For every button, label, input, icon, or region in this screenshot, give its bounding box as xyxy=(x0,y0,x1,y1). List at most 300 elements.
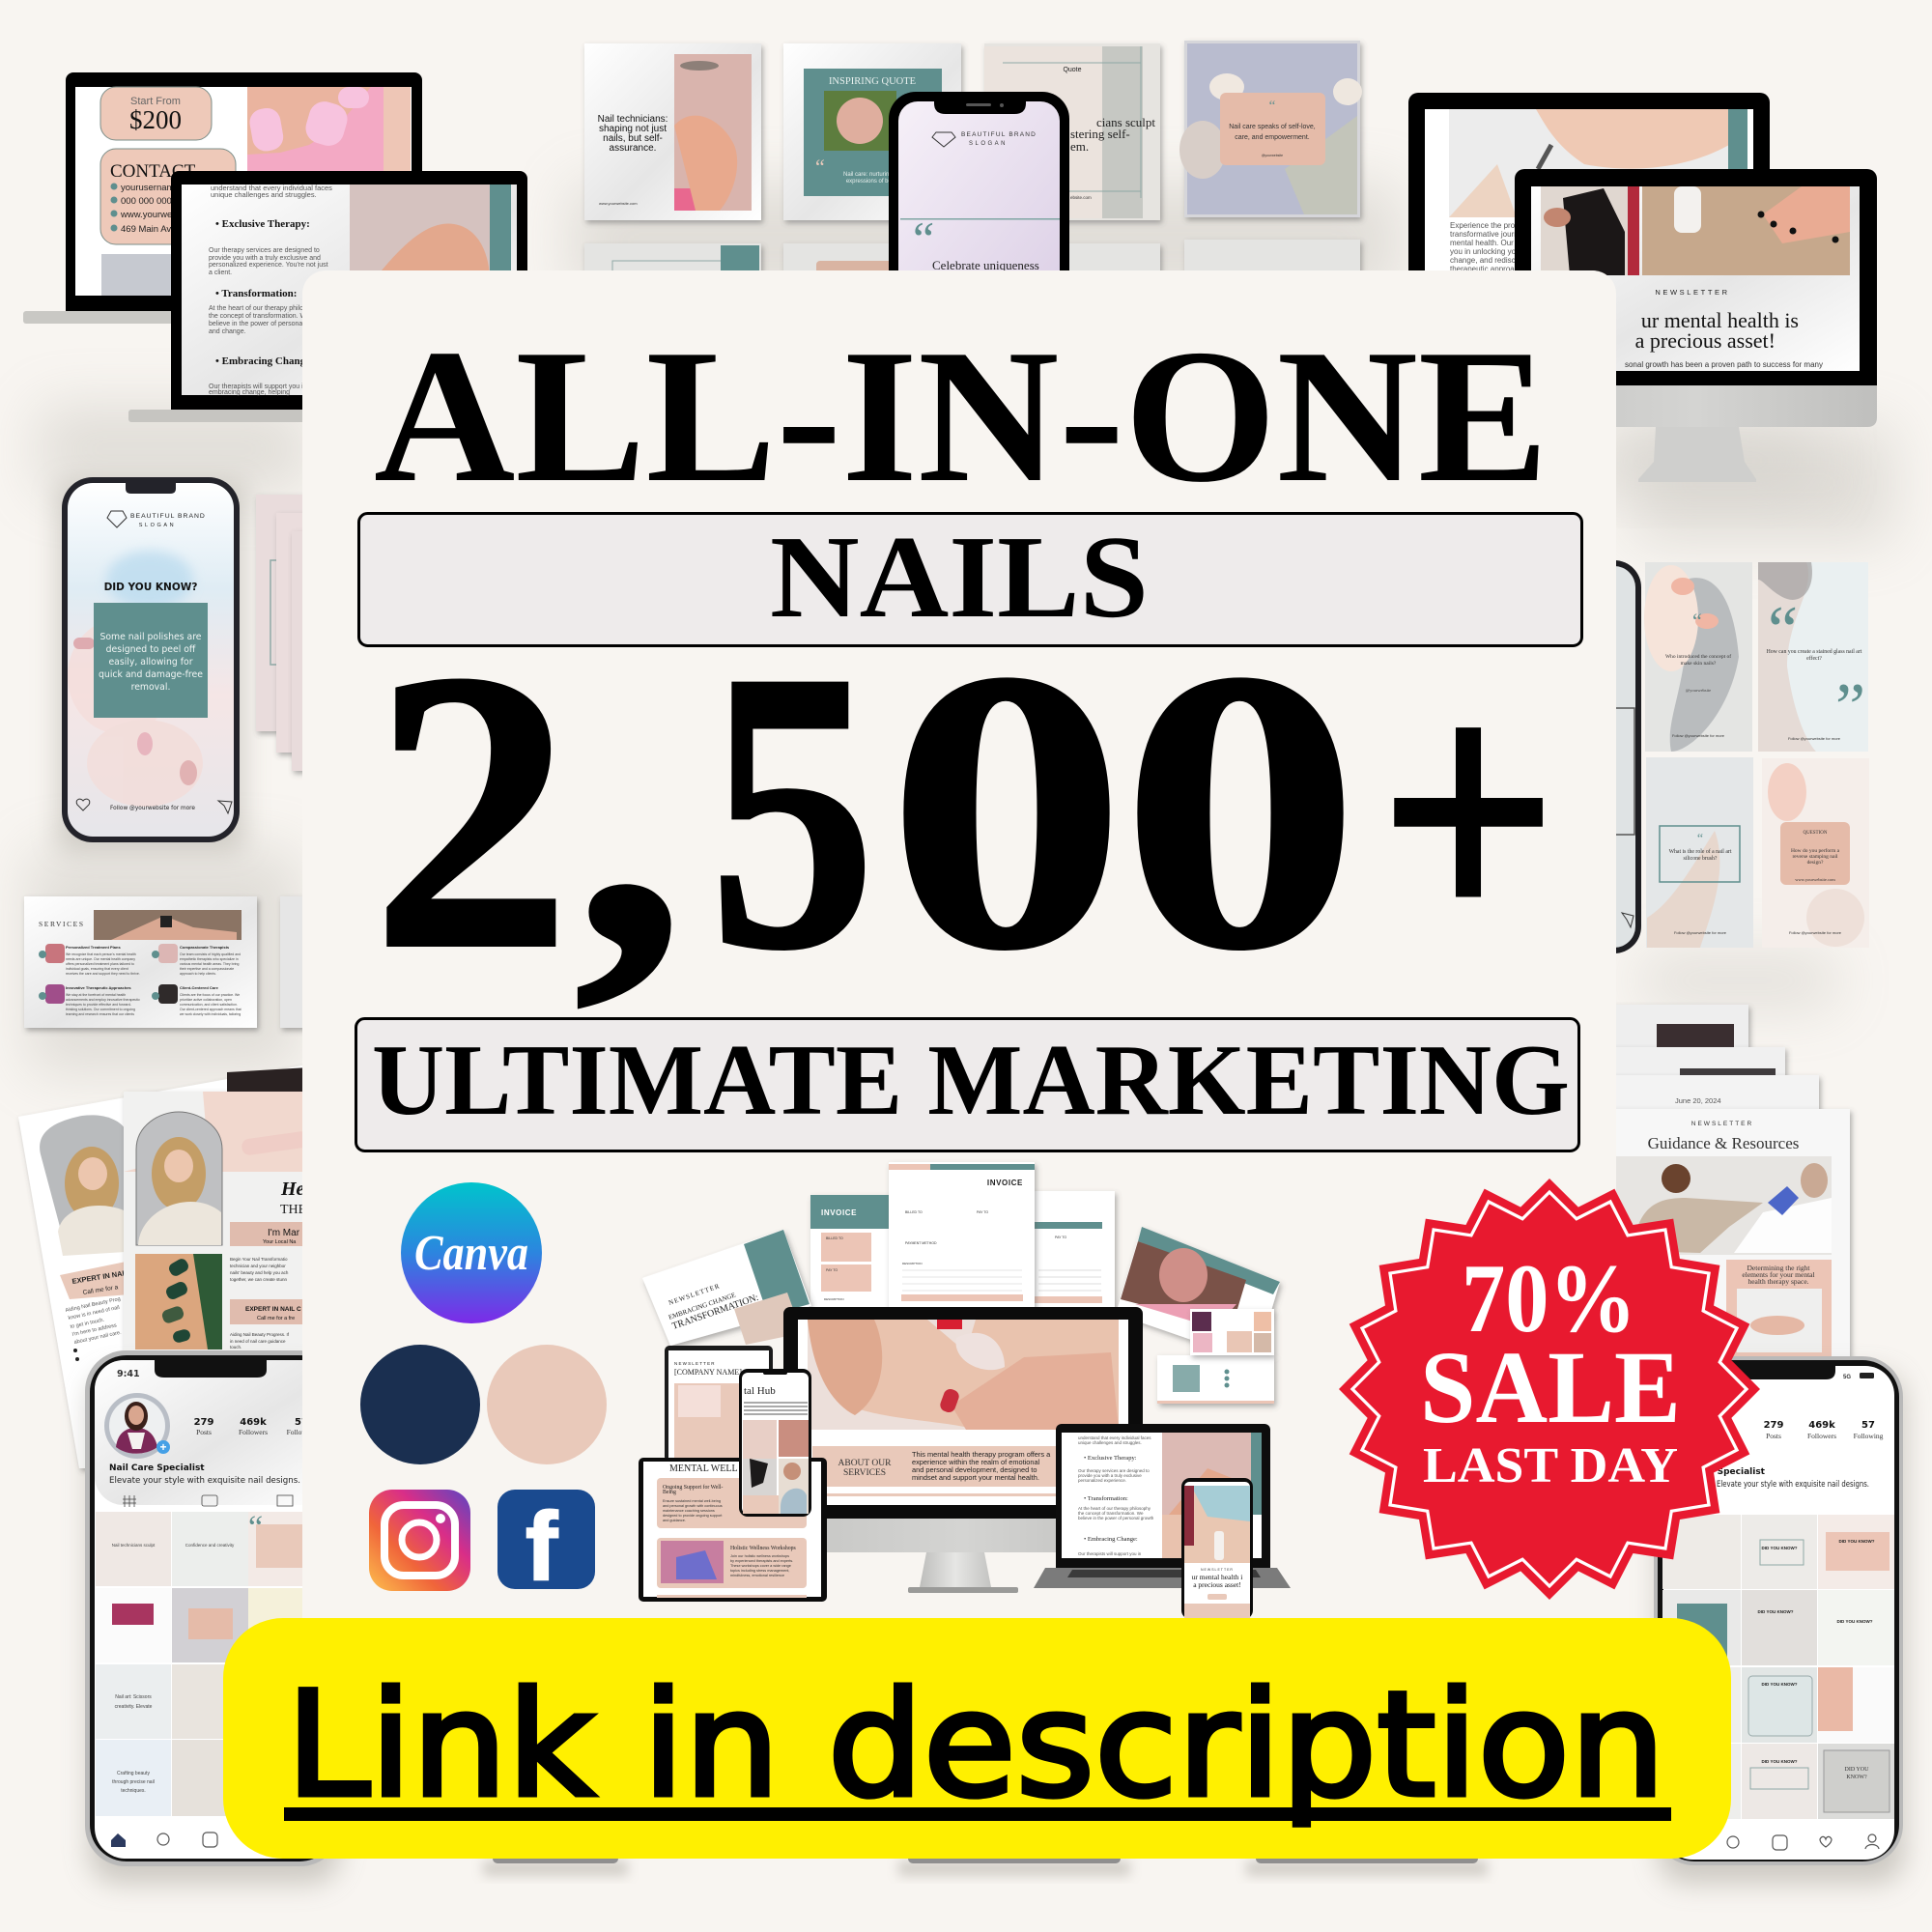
tablet front: Ensure sustained mental well-being xyxy=(663,1499,721,1503)
post grid: techniques. xyxy=(121,1788,146,1794)
phone: top center: BEAUTIFUL BRAND xyxy=(961,131,1037,138)
phone mini left: tal Hub xyxy=(744,1385,776,1397)
invoice right: PAY TO xyxy=(1055,1236,1066,1239)
monitor front: newsletter: sonal growth has been a proven path to success for many xyxy=(1625,360,1823,369)
service items: We recognize that each person's mental health xyxy=(66,952,136,956)
soft mockup shadows xyxy=(29,184,1893,1072)
big number: 2,500+: , xyxy=(574,590,686,1032)
service items: Our client-centered approach means that xyxy=(180,1008,242,1011)
phone: instagram profile right: Elevate your style with exquisite nail designs. xyxy=(1717,1480,1869,1490)
laptop: • Exclusive Therapy: xyxy=(1084,1455,1137,1462)
laptop: provide you with a truly exclusive xyxy=(1078,1473,1142,1478)
therapy text: provide you with a truly exclusive and xyxy=(209,255,321,262)
laptop: unique challenges and struggles. xyxy=(1078,1440,1142,1445)
therapy text: understand that every individual faces xyxy=(211,184,332,192)
contact card xyxy=(100,149,236,244)
title: ALL-IN-ONE: ALL-IN-ONE xyxy=(374,310,1548,522)
post grid: DID YOU KNOW? xyxy=(1839,1539,1875,1544)
invoice center: BILLED TO xyxy=(905,1210,923,1214)
big number: 2,500+: 5 xyxy=(709,590,875,1032)
rotated newsletter left: NEWSLETTER xyxy=(668,1282,721,1307)
heading box: NAILS xyxy=(359,512,1582,645)
rotated newsletter left: EMBRACING CHANGE xyxy=(668,1292,737,1321)
flyer: front: technician and your neighbor xyxy=(230,1264,286,1268)
phone: instagram profile right: 5G xyxy=(1843,1375,1851,1380)
nail salon photo xyxy=(1616,1156,1832,1255)
newsletter stack: NEWSLETTER xyxy=(1691,1121,1753,1127)
collage card xyxy=(1157,1309,1274,1404)
laptop: personalized experience. xyxy=(1078,1478,1126,1483)
tablet back: [COMPANY NAME] xyxy=(674,1368,742,1377)
post grid card: peach question: reverse stamping nail xyxy=(1792,854,1838,860)
services card xyxy=(24,896,319,1028)
tablet front: Being xyxy=(663,1490,676,1495)
sale badge xyxy=(1339,1179,1760,1600)
profile stats: Following xyxy=(1854,1432,1884,1440)
phone: top center: Celebrate uniqueness xyxy=(932,258,1039,272)
social post: nail technicians: assurance. xyxy=(610,143,656,154)
newsletter stack: Guidance & Resources xyxy=(1648,1134,1799,1152)
big number: 2,500+: 0 xyxy=(888,590,1125,1032)
therapy text: At the heart of our therapy philosophy xyxy=(209,305,322,312)
big number: 2,500+: + xyxy=(1379,613,1557,1008)
icon: Instagram xyxy=(369,1490,470,1591)
flyer: front: THE xyxy=(280,1203,306,1217)
social post: quote face: Quote xyxy=(1063,67,1082,73)
post grid: DID YOU KNOW? xyxy=(1758,1609,1794,1614)
profile stats: 57 xyxy=(1861,1420,1875,1431)
tablet front: maintenance coaching sessions xyxy=(663,1509,715,1513)
about our services band: mindset and support your mental health. xyxy=(912,1473,1039,1482)
green nails photo xyxy=(135,1254,222,1350)
laptop: Our therapy services are designed to xyxy=(1078,1468,1150,1473)
tablet front: Holistic Wellness Workshops xyxy=(730,1546,797,1551)
service items: we work closely with individuals, tailoring xyxy=(180,1012,241,1016)
brand logo xyxy=(107,511,206,528)
monitor front: newsletter: ur mental health is xyxy=(1641,308,1799,332)
icon: Facebook xyxy=(497,1490,595,1601)
social post: self-love: @yourwebsite xyxy=(1262,154,1283,157)
tablet front: designed to provide ongoing support xyxy=(663,1514,723,1518)
stacked pink post cards xyxy=(256,495,315,771)
therapy text: • Embracing Change: xyxy=(215,355,314,367)
post grid card: quote face: effect? xyxy=(1806,655,1822,662)
tablet front xyxy=(639,1458,827,1602)
service items: Personalized Treatment Plans xyxy=(66,945,121,950)
avatar xyxy=(104,1393,170,1459)
invoice left xyxy=(810,1195,897,1321)
contact card: 469 Main Ave xyxy=(121,224,176,235)
flyer: rotated back: about your nail care. xyxy=(73,1330,123,1346)
phone: did you know xyxy=(58,477,243,850)
portrait arch xyxy=(136,1112,222,1245)
hand photo xyxy=(124,1092,309,1172)
flyer: front: He xyxy=(280,1179,305,1200)
phone: did you know: Follow @yourwebsite for more xyxy=(110,806,195,811)
invoice center: PAYMENT METHOD xyxy=(905,1241,937,1245)
colour swatch: peach xyxy=(487,1345,607,1464)
nav bar icons xyxy=(111,1833,217,1847)
post grid xyxy=(1662,1515,1894,1819)
post grid card: framed question: “ xyxy=(1697,832,1703,846)
profile stats: Following xyxy=(287,1428,317,1436)
post grid card: quote face: Follow @yourwebsite for more xyxy=(1788,736,1841,741)
social post: inspiring quote: INSPIRING QUOTE xyxy=(829,76,916,87)
phone: instagram profile right xyxy=(1654,1356,1905,1884)
newsletter stack xyxy=(1584,1005,1850,1389)
service items: thinking solutions. Our commitment to ongoing xyxy=(66,1008,135,1011)
post grid: “ xyxy=(248,1510,263,1546)
about our services band: experience within the realm of emotional xyxy=(912,1458,1040,1466)
icon: like heart xyxy=(76,799,90,810)
social post: self-love: “ xyxy=(1269,99,1276,114)
phone small right: NEWSLETTER xyxy=(1201,1568,1234,1572)
social post: inspiring quote: “ xyxy=(815,155,825,179)
social post: nail technicians xyxy=(584,43,761,220)
tablet front: Join our holistic wellness workshops xyxy=(730,1554,789,1558)
service items: empathetic therapists who specialize in xyxy=(180,957,239,961)
post grid card: gloved hand: @yourwebsite xyxy=(1686,688,1711,693)
brand logo: BEAUTIFUL BRAND xyxy=(130,513,206,520)
price card: Start From xyxy=(130,96,181,107)
profile stats: 469k xyxy=(1808,1420,1835,1431)
invoice left: DESCRIPTION xyxy=(824,1297,844,1301)
tablet front: MENTAL WELL xyxy=(669,1463,738,1474)
teal fact box: quick and damage-free xyxy=(99,669,203,680)
social post: quote face xyxy=(984,43,1160,220)
phone: instagram profile left: 9:41 xyxy=(117,1369,140,1379)
profile stats: Followers xyxy=(1807,1432,1836,1440)
therapy text: believe in the power of personal xyxy=(209,321,304,327)
flyer: front: Begin Your Nail Transformatio xyxy=(230,1257,288,1262)
post grid: through precise nail xyxy=(112,1779,155,1785)
flyer: front: I'm Mar xyxy=(268,1228,300,1238)
post grid card: quote face: How can you create a stained glass nail art xyxy=(1767,649,1862,655)
social post: self-love xyxy=(1179,41,1362,217)
tablet front: topics including stress management, xyxy=(730,1569,789,1573)
laptop: • Embracing Change: xyxy=(1084,1536,1138,1543)
post grid card: gloved hand xyxy=(1644,562,1752,752)
monitor back: nail drill page: mental health. Our de xyxy=(1450,239,1524,247)
icon: share xyxy=(218,801,232,813)
phone bottoms under banner xyxy=(483,1853,1488,1876)
teal fact box: Some nail polishes are xyxy=(99,632,202,642)
avatar: + xyxy=(159,1440,167,1454)
phone small right: ur mental health i xyxy=(1192,1573,1242,1581)
post grid card: peach question xyxy=(1762,758,1869,948)
tablet front: by experienced therapists and experts. xyxy=(730,1559,793,1563)
service items: Clients are the focus of our practice. We xyxy=(180,993,240,997)
price card: $200 xyxy=(129,105,182,134)
social post: inspiring quote xyxy=(783,43,961,220)
brand logo: SLOGAN xyxy=(139,523,176,528)
monitor front: newsletter: a precious asset! xyxy=(1635,328,1776,353)
service items: various mental health areas. They bring xyxy=(180,962,239,966)
social post: nail technicians: shaping not just xyxy=(599,124,667,134)
post grid: DID YOU KNOW? xyxy=(1837,1619,1873,1624)
post grid card: quote face: ” xyxy=(1835,670,1865,745)
post grid card: peach question: Follow @yourwebsite for more xyxy=(1789,930,1842,935)
monitor front: newsletter: NEWSLETTER xyxy=(1655,288,1730,297)
second row post accents xyxy=(612,245,894,274)
invoice right xyxy=(1024,1191,1115,1317)
price card xyxy=(100,87,212,140)
phone: instagram profile left xyxy=(85,1350,341,1884)
flyer: front: Aiding Nail Beauty Progress. If xyxy=(230,1332,290,1337)
tablet front: and personal growth with continuous xyxy=(663,1504,723,1508)
laptop: Our therapists will support you in xyxy=(1078,1551,1142,1556)
monitor back: nail drill page: Experience the profou xyxy=(1450,221,1525,230)
tablet front: Ongoing Support for Well- xyxy=(663,1484,723,1491)
post grid: DID YOU KNOW? xyxy=(1762,1759,1798,1764)
phone: top center xyxy=(889,92,1069,314)
profile stats: 279 xyxy=(194,1417,213,1428)
nav bar icons xyxy=(1727,1834,1879,1850)
post grid: KNOW? xyxy=(1846,1775,1867,1780)
social post: inspiring quote: Nail care: nurturing your xyxy=(843,172,905,178)
colour swatch: navy xyxy=(360,1345,480,1464)
social post: quote face: em. xyxy=(1070,139,1089,154)
flyer: rotated back: Call me for a xyxy=(82,1284,119,1296)
main panel xyxy=(302,270,1616,1662)
service items: offers personalized treatment plans tailored to xyxy=(66,962,134,966)
flyer: rotated back: Aiding Nail Beauty Prog xyxy=(65,1296,121,1314)
about our services band: ABOUT OUR xyxy=(838,1459,892,1468)
phone: right mid rim xyxy=(1546,560,1641,953)
service items: prioritize active collaboration, open xyxy=(180,998,232,1002)
service items: Compassionate Therapists xyxy=(180,945,230,950)
post grid card: gloved hand: Who introduced the concept of xyxy=(1665,653,1731,660)
therapy text: • Exclusive Therapy: xyxy=(215,218,310,230)
service items: individual goals, ensuring that every client xyxy=(66,967,128,971)
invoice left: BILLED TO xyxy=(826,1236,843,1240)
invoice left: INVOICE xyxy=(821,1208,857,1217)
banner: link in description xyxy=(223,1618,1731,1859)
post grid card: framed question: What is the role of a nail art xyxy=(1669,848,1732,855)
social post: self-love: Nail care speaks of self-love, xyxy=(1229,124,1316,130)
post grid: creativity. Elevate xyxy=(115,1704,153,1710)
peach article: elements for your mental xyxy=(1742,1270,1815,1279)
icon: Canva logo xyxy=(401,1182,542,1323)
rotated newsletter left xyxy=(642,1230,811,1346)
phone: top center: SLOGAN xyxy=(969,141,1008,147)
post grid card: peach question: design? xyxy=(1807,860,1824,866)
post grid card: quote face xyxy=(1758,562,1868,752)
teal fact box: removal. xyxy=(131,682,170,693)
peach article: Determining the right xyxy=(1747,1264,1810,1272)
post grid card: gloved hand: make skin nails? xyxy=(1681,661,1717,667)
post grid: DID YOU xyxy=(1845,1767,1869,1773)
therapy text: Our therapy services are designed to xyxy=(209,247,320,254)
laptop: pricing and contact page xyxy=(23,72,422,324)
laptop: At the heart of our therapy philosophy xyxy=(1078,1506,1151,1511)
about our services band: SERVICES xyxy=(843,1468,886,1478)
phone small right: a precious asset! xyxy=(1193,1580,1241,1589)
flyer: rotated back: know is in need of nail xyxy=(68,1305,120,1321)
rotated newsletter left: TRANSFORMATION: xyxy=(670,1293,760,1332)
flyer: rotated back xyxy=(18,1063,319,1468)
service items: learning and research ensures that our clients xyxy=(66,1012,134,1016)
big number: 2,500+: 2 xyxy=(372,590,571,1032)
flyer: rotated back: I'm here to address xyxy=(71,1322,118,1338)
laptop xyxy=(1034,1424,1291,1588)
service items: Innovative Therapeutic Approaches xyxy=(66,985,131,990)
teal fact box: easily, allowing for xyxy=(108,657,193,668)
invoice center xyxy=(889,1162,1035,1312)
post grid: Nail art: Scissors xyxy=(115,1694,152,1700)
therapy text: and change. xyxy=(209,328,246,335)
phone: instagram profile left: Nail Care Specialist xyxy=(109,1463,205,1473)
heading box: ULTIMATE MARKETING: ULTIMATE MARKETING xyxy=(372,1023,1570,1136)
phone: instagram profile left: Elevate your style with exquisite nail designs. xyxy=(109,1476,300,1486)
flyer: front: Call me for a fre xyxy=(257,1316,295,1321)
phone small right xyxy=(1181,1478,1253,1619)
tab icons xyxy=(123,1495,293,1507)
laptop: therapy services page xyxy=(128,171,527,422)
flyer: front: EXPERT IN NAIL C xyxy=(245,1306,301,1313)
flyer: front: touch. xyxy=(230,1345,242,1350)
peach article: health therapy space. xyxy=(1747,1277,1809,1286)
post grid card: framed question xyxy=(1646,757,1753,948)
rotated card right xyxy=(1116,1227,1280,1362)
post grid card: framed question: Follow @yourwebsite for more xyxy=(1674,930,1727,935)
monitor back: nail drill page: therapeutic approa xyxy=(1450,265,1515,273)
services card: SERVICES xyxy=(39,920,85,928)
invoice center: PAY TO xyxy=(977,1210,988,1214)
profile stats: 57 xyxy=(295,1417,308,1428)
teal fact box xyxy=(94,603,208,718)
therapy text: the concept of transformation. We xyxy=(209,313,310,320)
service items: communication, and client satisfaction. xyxy=(180,1003,238,1007)
big number: 2,500+: 0 xyxy=(1122,590,1359,1032)
profile stats: Posts xyxy=(196,1428,212,1436)
tablet back xyxy=(665,1346,773,1462)
contact card: www.yourwebsite xyxy=(120,210,191,220)
post grid card: quote face: “ xyxy=(1768,593,1798,668)
services banner photo xyxy=(94,910,242,940)
about our services band xyxy=(798,1446,1128,1496)
nails photo xyxy=(68,551,203,807)
profile stats: Followers xyxy=(239,1428,268,1436)
profile stats xyxy=(1764,1420,1884,1440)
social post: inspiring quote: expressions of beauty xyxy=(846,179,902,185)
social post: quote face: ebsite.com xyxy=(1070,195,1092,200)
post grid: DID YOU KNOW? xyxy=(1762,1682,1798,1687)
therapy text: • Transformation: xyxy=(215,288,297,299)
service items: techniques to provide effective and forward- xyxy=(66,1003,132,1007)
profile stats: Posts xyxy=(1766,1432,1781,1440)
phone: instagram profile right: Nail Care Specialist xyxy=(1669,1467,1766,1477)
monitor back: nail drill page: change, and rediscov xyxy=(1450,256,1523,265)
monitor back: nail drill page xyxy=(1408,93,1770,305)
post grid card: framed question: silicone brush? xyxy=(1684,856,1718,862)
social post: nail technicians: www.yourwebsite.com xyxy=(599,201,638,206)
monitor hand photo xyxy=(808,1320,1119,1430)
flyer: front: nails' beauty and help you ach xyxy=(230,1270,289,1275)
service items xyxy=(39,944,242,1016)
heading box: NAILS: NAILS xyxy=(770,512,1149,642)
post grid: Crafting beauty xyxy=(117,1771,150,1776)
flyer: front: in need of nail care guidance xyxy=(230,1339,286,1344)
flyer: front: Your Local Na xyxy=(263,1239,297,1245)
sale badge: SALE xyxy=(1420,1331,1681,1445)
sale badge: LAST DAY xyxy=(1423,1438,1678,1493)
post grid card: gloved hand: Follow @yourwebsite for more xyxy=(1672,733,1725,738)
about our services band: and personal development, designed to xyxy=(912,1465,1037,1474)
portrait arch xyxy=(40,1115,145,1236)
tablet front: These workshops cover a wide range xyxy=(730,1564,791,1568)
laptop: understand that every individual faces xyxy=(1078,1435,1151,1440)
post grid card: peach question: QUESTION xyxy=(1803,831,1828,836)
phone mini left xyxy=(739,1369,811,1517)
tablet back: NEWSLETTER xyxy=(674,1361,716,1366)
flyer: rotated back: EXPERT IN NAIL xyxy=(71,1268,129,1286)
flyer: front: together, we can create stunn xyxy=(230,1277,288,1282)
teal fact box: designed to peel off xyxy=(106,644,196,655)
therapy text: Our therapists will support you in xyxy=(209,384,307,390)
service items: Client-Centered Care xyxy=(180,985,219,990)
flyer: front xyxy=(124,1067,310,1362)
contact card: 000 000 000 xyxy=(121,196,172,207)
service items: approach to help clients. xyxy=(180,972,216,976)
post grid card: gloved hand: “ xyxy=(1692,609,1702,633)
contact card: CONTACT xyxy=(110,161,196,182)
post grid: Nail technicians sculpt xyxy=(112,1543,156,1548)
post grid: Confidence and creativity xyxy=(185,1543,235,1548)
peach article xyxy=(1726,1260,1832,1356)
social post: quote face: cians sculpt xyxy=(1096,115,1155,129)
profile stats xyxy=(194,1417,317,1436)
icon: Canva logo: Canva xyxy=(414,1226,528,1281)
monitor back: nail drill page: transformative journe xyxy=(1450,230,1523,239)
therapy text: unique challenges and struggles. xyxy=(211,190,317,199)
icon: Facebook: f xyxy=(526,1492,558,1601)
desktop monitor xyxy=(783,1307,1143,1593)
flyer: rotated back: to get in touch. xyxy=(70,1317,105,1330)
therapy text xyxy=(209,184,332,396)
social post: quote face: stering self- xyxy=(1070,127,1130,141)
therapy text: embracing change, helping xyxy=(209,389,290,396)
post grid: DID YOU KNOW? xyxy=(1762,1546,1798,1550)
post grid xyxy=(96,1510,325,1816)
social post: nail technicians: nails, but self- xyxy=(603,133,663,144)
laptop: the concept of transformation. We xyxy=(1078,1511,1144,1516)
profile stats: 469k xyxy=(240,1417,267,1428)
post grid card: peach question: www.yourwebsite.com xyxy=(1795,877,1835,882)
tablet front: and guidance. xyxy=(663,1519,686,1522)
tablet front: mindfulness, emotional resilience xyxy=(730,1574,784,1577)
service items: Our team consists of highly qualified and xyxy=(180,952,241,956)
phone: did you know: DID YOU KNOW? xyxy=(104,582,197,593)
about our services band: This mental health therapy program offers a xyxy=(912,1450,1051,1459)
service items: receives the care and support they need to thrive. xyxy=(66,972,140,976)
newsletter photos xyxy=(1541,186,1850,275)
big number: 2,500+ xyxy=(372,590,1557,1032)
contact card: yourusername xyxy=(121,183,180,193)
service items: advancements and employ innovative therapeutic xyxy=(66,998,140,1002)
sale badge: 70% xyxy=(1462,1244,1636,1353)
service items: We stay at the forefront of mental health xyxy=(66,993,126,997)
invoice left: PAY TO xyxy=(826,1268,838,1272)
service items: their expertise and a compassionate xyxy=(180,967,234,971)
laptop: • Transformation: xyxy=(1084,1495,1128,1502)
device mockup cluster xyxy=(639,1162,1291,1619)
post grid card: peach question: How do you perform a xyxy=(1791,847,1840,854)
invoice center: INVOICE xyxy=(987,1179,1023,1187)
banner: link in description: Link in description xyxy=(286,1662,1665,1830)
laptop: believe in the power of personal growth xyxy=(1078,1516,1154,1520)
therapy text: a client. xyxy=(209,270,232,276)
